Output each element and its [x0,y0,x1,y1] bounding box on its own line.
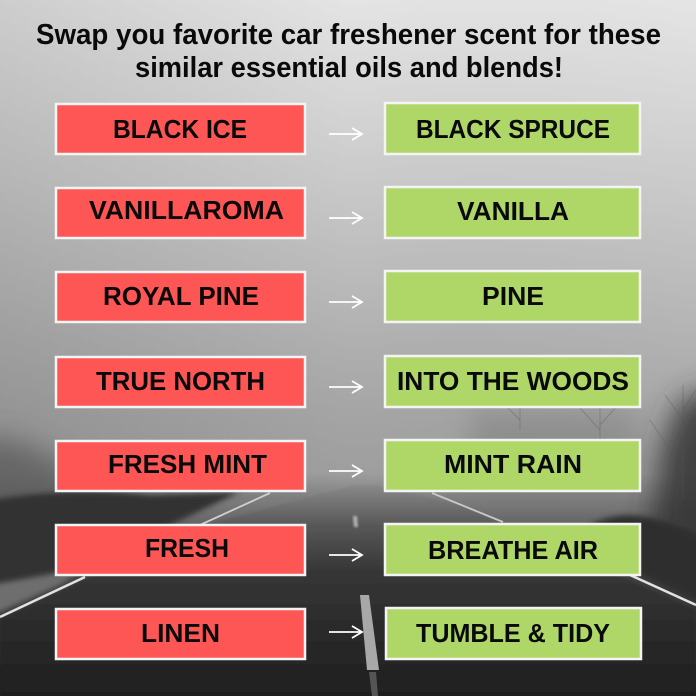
row 1: Black Ice to Black Spruce [56,103,640,154]
row 7: Linen to Tumble and Tidy [56,608,641,659]
row 6: Fresh to Breathe Air [56,524,640,575]
row 5: Fresh Mint to Mint Rain [56,440,640,491]
row 1: Black Ice to Black Spruce: BLACK SPRUCE [416,114,610,144]
row 4: True North to Into the Woods: TRUE NORTH [96,366,265,396]
row 2: Vanillaroma to Vanilla [56,187,640,238]
row 3: Royal Pine to Pine [56,271,640,322]
row 3: Royal Pine to Pine: PINE [482,281,544,311]
row 6: Fresh to Breathe Air: FRESH [145,533,229,563]
title: similar essential oils and blends! [135,52,563,84]
row 2: Vanillaroma to Vanilla: VANILLA [457,196,569,226]
title: Swap you favorite car freshener scent for these [36,19,661,51]
row 7: Linen to Tumble and Tidy: TUMBLE & TIDY [416,618,610,648]
row 4: True North to Into the Woods: INTO THE WOODS [397,366,629,396]
title [36,19,661,84]
row 5: Fresh Mint to Mint Rain: MINT RAIN [444,449,582,479]
row 4: True North to Into the Woods [56,356,640,407]
row 7: Linen to Tumble and Tidy: LINEN [141,618,220,648]
row 1: Black Ice to Black Spruce: BLACK ICE [113,114,247,144]
row 6: Fresh to Breathe Air: BREATHE AIR [428,535,598,565]
row 2: Vanillaroma to Vanilla: VANILLAROMA [89,195,284,225]
row 3: Royal Pine to Pine: ROYAL PINE [103,281,259,311]
row 5: Fresh Mint to Mint Rain: FRESH MINT [108,449,267,479]
